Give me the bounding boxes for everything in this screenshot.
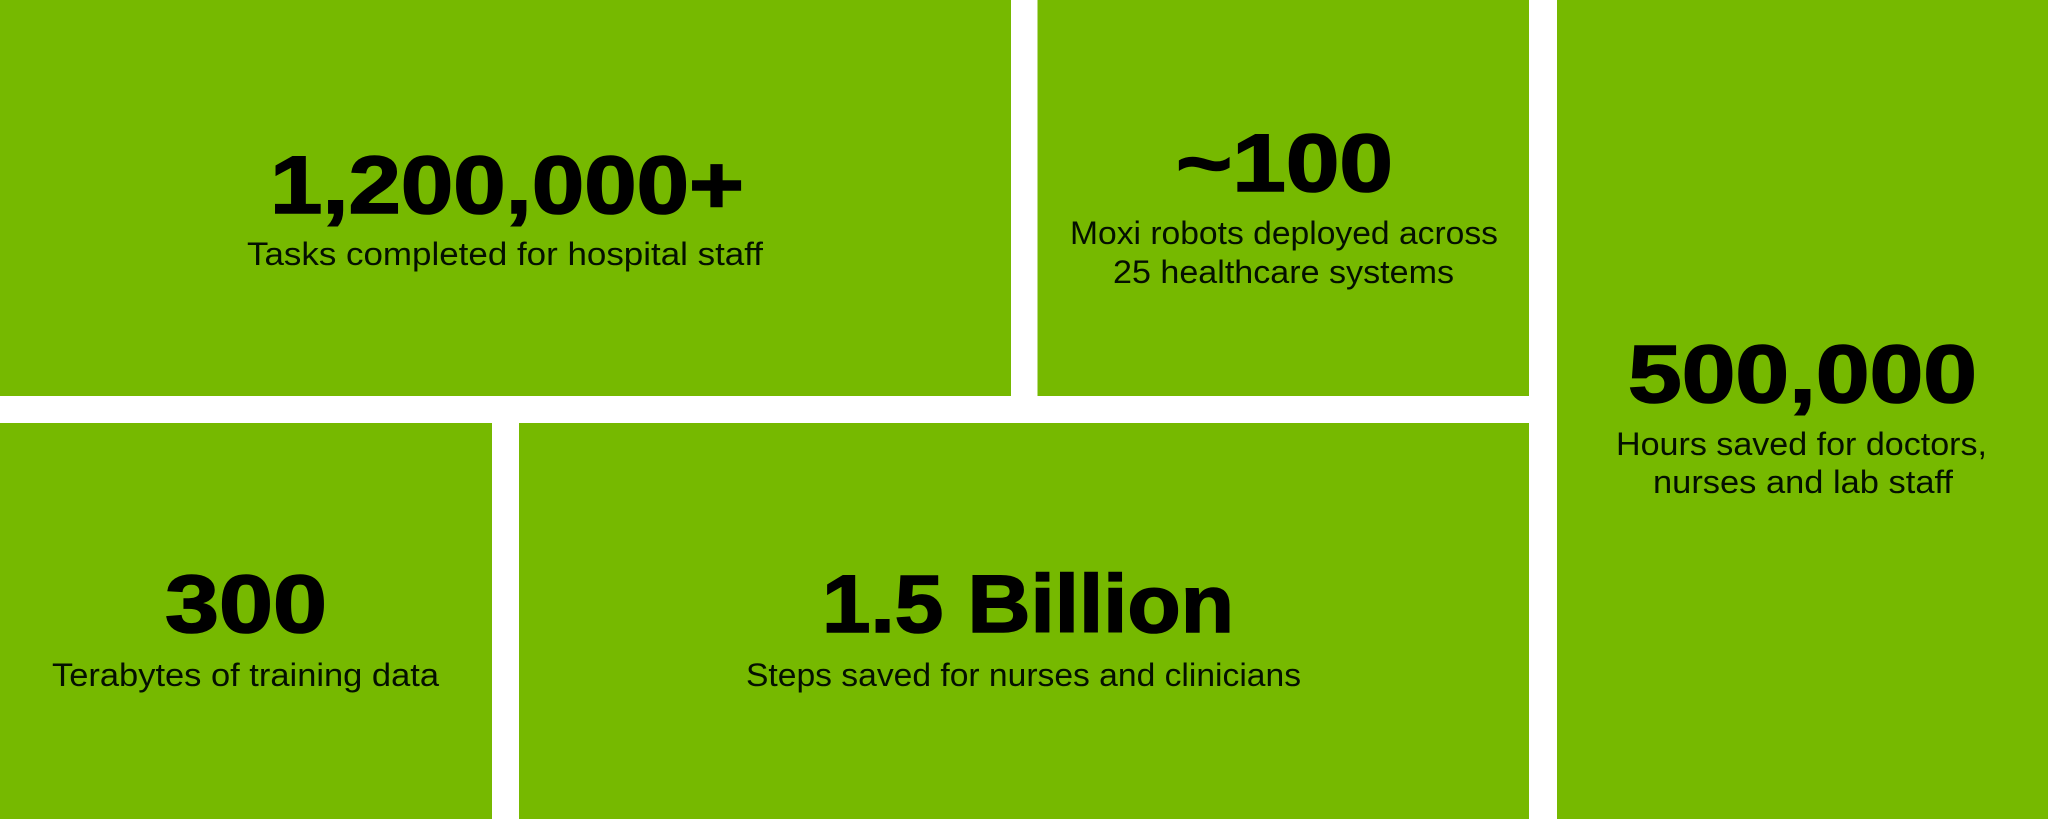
label: hours saved bbox=[1616, 426, 1987, 500]
label: robots deployed bbox=[1070, 215, 1498, 290]
number: ~100: ~100 bbox=[1176, 118, 1393, 209]
label: steps saved: Steps saved for nurses and clinicians bbox=[746, 657, 1301, 693]
panel: training data bbox=[0, 423, 492, 819]
panel: robots deployed bbox=[1038, 0, 1529, 396]
number: 300: 300 bbox=[165, 559, 327, 650]
number: 1.5 Billion: 1.5 Billion bbox=[822, 559, 1234, 650]
label: robots deployed: 25 healthcare systems bbox=[1113, 254, 1454, 290]
number: 1,200,000+: 1,200,000+ bbox=[270, 140, 744, 231]
label: hours saved: Hours saved for doctors, bbox=[1616, 426, 1987, 462]
panel: tasks completed bbox=[0, 0, 1011, 396]
panel: hours saved bbox=[1557, 0, 2048, 819]
label: robots deployed: Moxi robots deployed across bbox=[1070, 215, 1498, 251]
number: 500,000: 500,000 bbox=[1628, 329, 1977, 420]
label: training data: Terabytes of training data bbox=[52, 657, 439, 693]
panel: steps saved bbox=[519, 423, 1529, 819]
label: hours saved: nurses and lab staff bbox=[1653, 464, 1953, 500]
label: tasks completed: Tasks completed for hospital staff bbox=[247, 236, 763, 272]
